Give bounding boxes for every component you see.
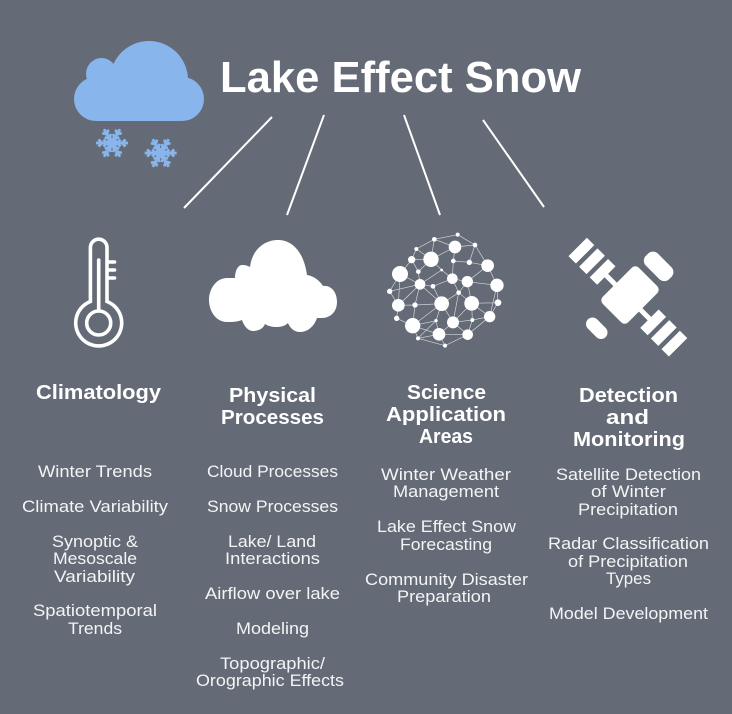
heading: Physical Processes: Processes bbox=[221, 407, 324, 429]
list: Climatology topics bbox=[22, 462, 169, 638]
list: Detection and Monitoring topics: Precipitation bbox=[578, 500, 678, 519]
heading: Science Application Areas: Science bbox=[407, 382, 486, 404]
title: Lake Effect Snow bbox=[220, 53, 582, 102]
list: Science Application Areas topics: Winter Weather bbox=[381, 465, 511, 484]
list: Physical Processes topics: Interactions bbox=[225, 549, 320, 568]
list: Detection and Monitoring topics: of Winter bbox=[591, 482, 666, 501]
heading: Science Application Areas bbox=[386, 382, 506, 448]
column: Science Application Areas bbox=[365, 382, 528, 606]
heading: Detection and Monitoring: Detection bbox=[579, 385, 678, 407]
list: Physical Processes topics bbox=[196, 462, 344, 690]
heading: Detection and Monitoring: Monitoring bbox=[573, 429, 685, 451]
list: Science Application Areas topics bbox=[365, 465, 528, 606]
list: Science Application Areas topics: Forecasting bbox=[400, 535, 492, 554]
list: Detection and Monitoring topics bbox=[548, 465, 709, 623]
column: Climatology bbox=[22, 382, 169, 638]
list: Science Application Areas topics: Lake Effect Snow bbox=[377, 517, 517, 536]
list: Climatology topics: Climate Variability bbox=[22, 497, 169, 516]
heading: Detection and Monitoring bbox=[573, 385, 685, 451]
icon: network sphere bbox=[387, 233, 504, 348]
list: Physical Processes topics: Topographic/ bbox=[220, 654, 325, 673]
list: Climatology topics: Variability bbox=[54, 567, 136, 586]
list: Science Application Areas topics: Community Disaster bbox=[365, 570, 528, 589]
list: Detection and Monitoring topics: Radar Classification bbox=[548, 534, 709, 553]
list: Physical Processes topics: Airflow over lake bbox=[205, 584, 340, 603]
list: Climatology topics: Mesoscale bbox=[53, 549, 137, 568]
list: Climatology topics: Spatiotemporal bbox=[33, 601, 157, 620]
list: Physical Processes topics: Modeling bbox=[236, 619, 309, 638]
list: Detection and Monitoring topics: of Precipitation bbox=[568, 552, 688, 571]
heading: Climatology: Climatology bbox=[36, 382, 162, 404]
list: Physical Processes topics: Cloud Processes bbox=[207, 462, 338, 481]
connector lines from title to the four columns bbox=[184, 115, 544, 215]
list: Climatology topics: Winter Trends bbox=[38, 462, 152, 481]
list: Physical Processes topics: Orographic Effects bbox=[196, 671, 344, 690]
column: Detection and Monitoring bbox=[548, 385, 709, 623]
icon: thermometer bbox=[76, 239, 122, 346]
list: Science Application Areas topics: Preparation bbox=[397, 587, 491, 606]
list: Climatology topics: Synoptic & bbox=[52, 532, 139, 551]
list: Climatology topics: Trends bbox=[68, 619, 122, 638]
icon: satellite bbox=[542, 210, 715, 383]
heading: Detection and Monitoring: and bbox=[606, 407, 649, 429]
list: Detection and Monitoring topics: Satellite Detection bbox=[556, 465, 701, 484]
column: Physical Processes bbox=[196, 385, 344, 690]
list: Detection and Monitoring topics: Types bbox=[606, 569, 651, 588]
heading: Science Application Areas: Application bbox=[386, 404, 506, 426]
icon: white cloud bbox=[209, 240, 337, 332]
heading: Physical Processes: Physical bbox=[229, 385, 316, 407]
list: Science Application Areas topics: Management bbox=[393, 482, 499, 501]
heading: Physical Processes bbox=[221, 385, 324, 429]
list: Physical Processes topics: Snow Processes bbox=[207, 497, 338, 516]
list: Detection and Monitoring topics: Model Development bbox=[549, 604, 708, 623]
list: Physical Processes topics: Lake/ Land bbox=[228, 532, 316, 551]
icon: snow cloud bbox=[74, 41, 204, 169]
heading: Science Application Areas: Areas bbox=[419, 426, 473, 448]
